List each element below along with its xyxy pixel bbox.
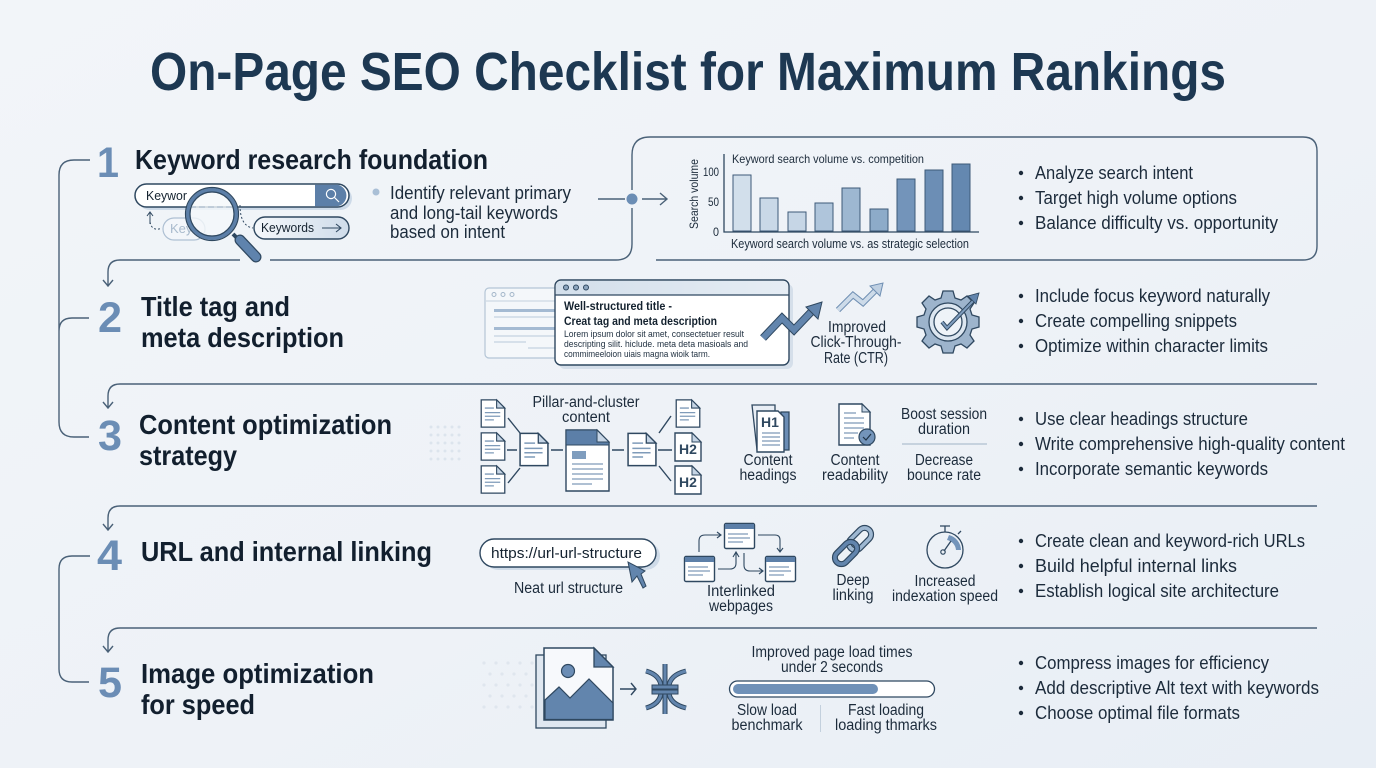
- icon: light growth arrow: [838, 283, 883, 310]
- step number 5: 5: [98, 659, 122, 707]
- text: fast loading: loading thmarks: [835, 717, 937, 734]
- H2 documents: H2: [679, 441, 697, 457]
- text: improved CTR: Click-Through-: [810, 334, 902, 351]
- text: improved load times: Improved page load times: [752, 644, 913, 661]
- bar chart: keyword search volume vs competition: Keyword search volume vs. competition: [732, 152, 924, 166]
- y axis labels: 100: [703, 165, 719, 179]
- text: increased indexation speed: indexation speed: [892, 588, 998, 605]
- diagram: pillar and cluster content: [481, 394, 701, 494]
- step number 1: 1: [97, 139, 119, 187]
- diagram: pillar and cluster content: content: [562, 409, 611, 426]
- bullet list: step 1: Balance difficulty vs. opportunity: [1035, 213, 1278, 233]
- bullet list: step 1: Target high volume options: [1035, 188, 1237, 208]
- bullet list: step 3: [1019, 409, 1345, 479]
- step number 4: 4: [97, 532, 122, 580]
- text: deep linking: linking: [832, 587, 874, 604]
- text: slow load benchmark: Slow load: [737, 702, 797, 719]
- text: session duration and bounce rate: duration: [918, 421, 970, 438]
- text: content readability: [822, 452, 888, 484]
- diagram: pillar and cluster content: Pillar-and-cluster: [532, 394, 640, 411]
- panel: step 5 image optimization: [98, 644, 1319, 734]
- panel: step 2 title tag: [98, 280, 1270, 369]
- bullet list: step 4: [1019, 531, 1305, 601]
- bullet list: step 5: [1019, 653, 1319, 723]
- heading: step 5: Image optimization: [141, 658, 374, 689]
- H2 documents: [675, 433, 701, 494]
- icon: chain link: [832, 525, 874, 567]
- icon: front browser window with meta description: commimeeloion uiais magna wioik tarm.: [564, 349, 710, 360]
- icon: front browser window with meta description: Creat tag and meta description: [564, 316, 717, 328]
- panel: step 1 keyword research: [97, 137, 1317, 286]
- text block: keyword intent: Identify relevant primary: [390, 183, 571, 203]
- text block: keyword intent: based on intent: [390, 222, 505, 242]
- bullet list: step 3: Incorporate semantic keywords: [1035, 459, 1268, 479]
- y axis labels: 50: [708, 195, 719, 209]
- bullet list: step 1: [1019, 163, 1278, 233]
- title: On-Page SEO Checklist for Maximum Rankings: [150, 42, 1226, 102]
- icon: keyword search bar with magnifier: Keywords: [261, 220, 314, 235]
- heading: step 3: Content optimization: [139, 409, 392, 440]
- text: fast loading: [835, 702, 937, 734]
- heading: step 4: URL and internal linking: [141, 536, 432, 567]
- text: session duration and bounce rate: Decrease: [915, 452, 973, 469]
- bullet list: step 4: Establish logical site architecture: [1035, 581, 1279, 601]
- text: neat url structure: Neat url structure: [514, 580, 623, 597]
- connector: arrow to step 5: [103, 628, 1317, 652]
- icon: H1 content headings: H1: [761, 414, 779, 430]
- icon: URL bar with cursor: https://url-url-structure: [491, 545, 642, 562]
- left bracket connector: steps 1 to 3: [59, 160, 90, 437]
- text: interlinked webpages: Interlinked: [707, 583, 775, 600]
- text: session duration and bounce rate: [901, 406, 987, 484]
- text: increased indexation speed: [892, 573, 998, 605]
- text: improved CTR: [810, 319, 902, 367]
- icon: gear with check and arrow: [917, 291, 979, 353]
- panel: step 2 title tag: meta description: [141, 322, 344, 353]
- bullet list: step 2: Create compelling snippets: [1035, 311, 1237, 331]
- bar chart: keyword search volume vs competition: [687, 152, 979, 251]
- panel: step 5 image optimization: for speed: [141, 689, 255, 720]
- bullet list: step 3: Write comprehensive high-quality content: [1035, 434, 1345, 454]
- icon: dark growth arrow: [763, 302, 822, 338]
- connector: chart frame and arrow to step 2: [103, 137, 1317, 286]
- step number 3: 3: [98, 412, 122, 460]
- bar chart: keyword search volume vs competition: Keyword search volume vs. as strategic selection: [731, 237, 969, 251]
- icon: keyword search bar with magnifier: [135, 184, 352, 257]
- icon: front browser window with meta description: [555, 280, 793, 369]
- bullet list: step 5: Choose optimal file formats: [1035, 703, 1240, 723]
- pillar document: [566, 430, 609, 491]
- icon: H1 content headings: [752, 405, 789, 452]
- heading: step 1: Keyword research foundation: [135, 144, 488, 175]
- y axis labels: 0: [713, 225, 719, 239]
- text: improved CTR: Rate (CTR): [824, 350, 888, 367]
- text: deep linking: Deep: [836, 572, 870, 589]
- icon: keyword search bar with magnifier: Key: [170, 221, 193, 236]
- bullet list: step 5: Compress images for efficiency: [1035, 653, 1269, 673]
- text: deep linking: [832, 572, 874, 604]
- icon: image file: [536, 648, 613, 728]
- text: content readability: readability: [822, 467, 888, 484]
- icon: document with check: [839, 404, 875, 445]
- bullet list: step 2: Optimize within character limits: [1035, 336, 1268, 356]
- text: interlinked webpages: [707, 583, 775, 615]
- text: fast loading: Fast loading: [848, 702, 924, 719]
- panel: step 3 content optimization: strategy: [139, 440, 237, 471]
- H2 documents: H2: [679, 474, 697, 490]
- text: slow load benchmark: benchmark: [732, 717, 803, 734]
- icon: back browser window: [485, 288, 565, 358]
- text: improved load times: [752, 644, 913, 676]
- text: content headings: [740, 452, 797, 484]
- bullet list: step 4: Build helpful internal links: [1035, 556, 1237, 576]
- bullet list: step 2: [1019, 286, 1270, 356]
- text block: keyword intent: and long-tail keywords: [390, 203, 558, 223]
- icon: keyword search bar with magnifier: Keywor: [146, 188, 188, 203]
- bullet list: step 4: Create clean and keyword-rich URLs: [1035, 531, 1305, 551]
- panel: step 3 content optimization: [98, 394, 1345, 494]
- connector: arrow to step 4: [103, 506, 1317, 530]
- text: session duration and bounce rate: Boost session: [901, 406, 987, 423]
- connector: arrow to step 3: [103, 384, 1317, 408]
- y axis title: Search volume: [687, 159, 701, 229]
- text: improved load times: under 2 seconds: [781, 659, 883, 676]
- icon: front browser window with meta description: Lorem ipsum dolor sit amet, consectetuer result: [564, 329, 744, 340]
- bullet list: step 2: Include focus keyword naturally: [1035, 286, 1270, 306]
- progress bar: page load speed: [730, 681, 934, 697]
- bullet list: step 3: Use clear headings structure: [1035, 409, 1248, 429]
- step number 2: 2: [98, 294, 122, 342]
- icon: stopwatch: [927, 526, 963, 568]
- icon: URL bar with cursor: [480, 539, 660, 588]
- bullet list: step 1: Analyze search intent: [1035, 163, 1193, 183]
- icon: compression clamp: [646, 664, 686, 714]
- icon: front browser window with meta description: descripting silit. hiclude. meta deta masioals and: [564, 339, 748, 350]
- y axis labels: [703, 165, 719, 239]
- text: slow load benchmark: [732, 702, 803, 734]
- text block: keyword intent: [372, 183, 571, 242]
- bullet list: step 5: Add descriptive Alt text with keywords: [1035, 678, 1319, 698]
- left bracket connector: steps 4 to 5: [59, 556, 90, 682]
- text: content headings: headings: [740, 467, 797, 484]
- text: interlinked webpages: webpages: [708, 598, 773, 615]
- text: content headings: Content: [744, 452, 793, 469]
- arrow: compression step: [620, 683, 636, 695]
- dot pattern: [430, 426, 460, 460]
- text: session duration and bounce rate: bounce rate: [907, 467, 981, 484]
- text: improved CTR: Improved: [828, 319, 886, 336]
- panel: step 4 URL and internal linking: [97, 524, 1305, 615]
- heading: step 2: Title tag and: [141, 291, 290, 322]
- diagram: interlinked webpages: [684, 524, 796, 582]
- text: content readability: Content: [830, 452, 880, 469]
- text: increased indexation speed: Increased: [914, 573, 976, 590]
- icon: front browser window with meta description: Well-structured title -: [564, 301, 672, 313]
- dot pattern: [482, 661, 534, 709]
